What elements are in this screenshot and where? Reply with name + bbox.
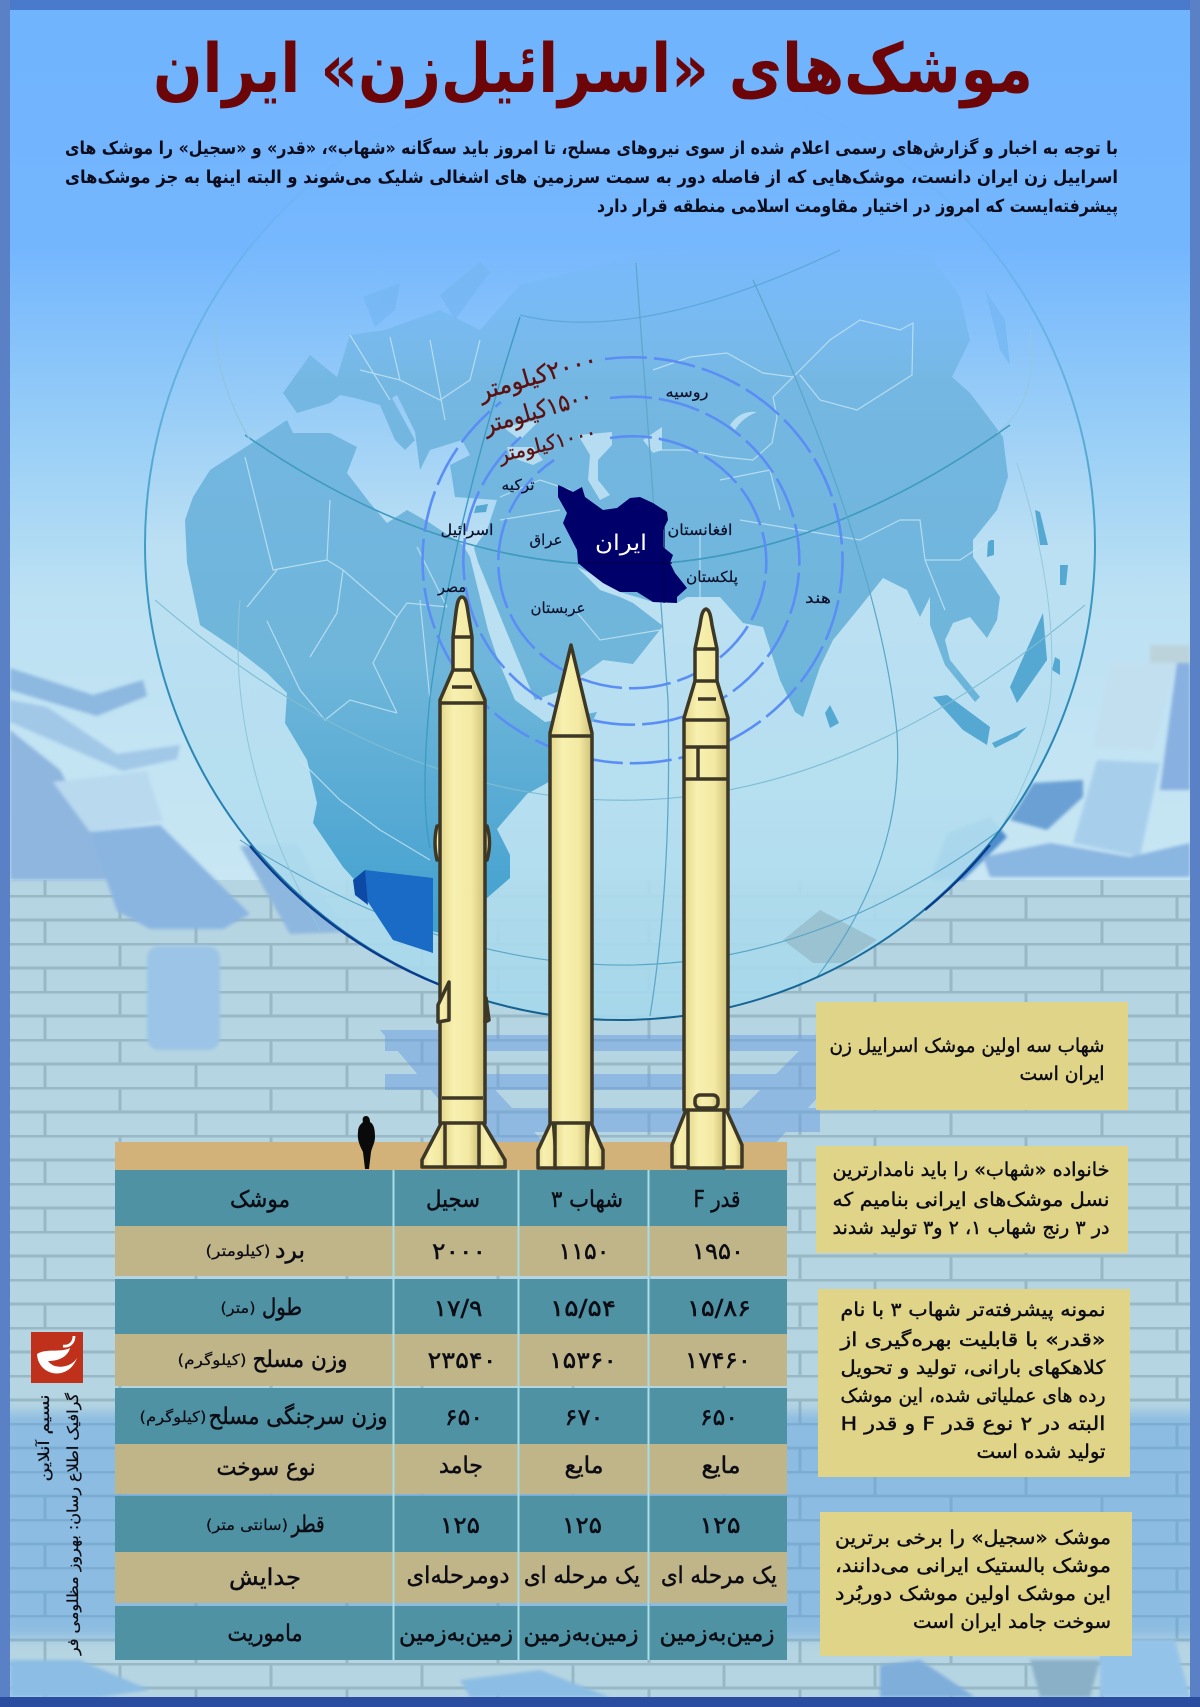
column: Sejil values: زمین‌به‌زمین [399, 1621, 513, 1647]
info box 3 [818, 1289, 1130, 1477]
column: Sejil values: ۲۰۰۰ [432, 1239, 486, 1265]
column: Ghadr F values: ۱۹۵۰ [692, 1239, 744, 1265]
fallen bricks left [10, 668, 343, 1050]
info box 4: موشک بالستیک ایرانی می‌دانند، [835, 1555, 1111, 1577]
column: Shahab 3 values: یک مرحله ای [524, 1563, 640, 1589]
range rings [423, 357, 843, 763]
brick dark blue through globe [353, 870, 433, 953]
info box 2: خانواده «شهاب» را باید نامدارترین [832, 1159, 1110, 1181]
row labels [140, 1187, 388, 1647]
row labels: ماموریت [228, 1621, 302, 1647]
column: Ghadr F values: یک مرحله ای [661, 1563, 777, 1589]
column: Ghadr F values: مایع [702, 1453, 740, 1479]
column: Shahab 3 values [524, 1187, 640, 1647]
fallen bricks bottom [10, 1640, 1190, 1697]
row labels: قطر [291, 1512, 324, 1538]
column: Shahab 3 values: زمین‌به‌زمین [524, 1621, 638, 1647]
intro paragraph [65, 137, 1118, 217]
credit: Tasnim Online: نسیم آنلاین [35, 1394, 53, 1482]
Iran grid lines [578, 510, 672, 603]
missile: Sejil [422, 597, 505, 1167]
info box 2 [816, 1146, 1128, 1253]
Iran label: ایران [595, 531, 647, 556]
person silhouette [358, 1116, 375, 1169]
column: Ghadr F values: ۶۵۰ [700, 1405, 738, 1431]
country labels: پلکستان [686, 568, 738, 587]
column: Sejil values: جامد [439, 1453, 483, 1479]
column: Shahab 3 values: ۱۲۵ [562, 1513, 602, 1539]
row labels: موشک [230, 1187, 290, 1213]
country labels: عربستان [530, 599, 586, 617]
info box 2: در ۳ رنج شهاب ۱، ۲ و۳ تولید شدند [832, 1217, 1110, 1239]
landmass: Eurasia [283, 245, 1008, 717]
ground strip [115, 1142, 787, 1170]
country borders [245, 320, 990, 860]
info box 4: این موشک اولین موشک دوربُرد [835, 1583, 1111, 1605]
info box 3: کلاهکهای بارانی، تولید و تحویل [840, 1357, 1107, 1379]
comparison table [115, 1170, 787, 1660]
background brick wall [0, 880, 1200, 1707]
row labels: نوع سوخت [216, 1455, 316, 1481]
country labels: مصر [437, 578, 466, 596]
globe [145, 70, 1095, 1020]
row labels: (سانتی متر) [206, 1516, 288, 1534]
info box 1: ایران است [1020, 1063, 1104, 1085]
intro paragraph: اسراییل زن ایران دانست، موشک‌هایی که از فاصله دور به سمت سرزمین های اشغالی شلیک می‌شوند و البته اینها به جز موشک‌های [65, 167, 1118, 188]
row labels: برد [275, 1238, 305, 1264]
row labels: وزن مسلح [252, 1347, 348, 1373]
country labels: ترکیه [502, 476, 534, 494]
column: Shahab 3 values: ۱۵۳۶۰ [549, 1348, 617, 1374]
info box 3: نمونه پیشرفته‌تر شهاب ۳ با نام [840, 1299, 1106, 1321]
table column lines [394, 1170, 648, 1660]
missile: Ghadr F [672, 609, 742, 1168]
row labels: (کیلومتر) [206, 1242, 270, 1260]
range labels [474, 345, 600, 467]
inland seas [503, 412, 757, 500]
islands [474, 504, 1068, 748]
globe sphere [145, 70, 1095, 1020]
country labels [437, 383, 831, 617]
background sky [0, 0, 1200, 880]
column: Shahab 3 values: ۶۷۰ [564, 1405, 604, 1431]
info box 1 [816, 1002, 1128, 1110]
table rows [115, 1170, 787, 1660]
country labels: اسرائیل [440, 521, 494, 539]
info box 4: موشک «سجیل» را برخی برترین [835, 1527, 1111, 1549]
column: Shahab 3 values: شهاب ۳ [551, 1187, 623, 1213]
credit: graphic author: گرافیک اطلاع رسان: بهروز مظلومی فر [64, 1392, 82, 1656]
info box 1: شهاب سه اولین موشک اسراییل زن [830, 1035, 1104, 1057]
info box 4: سوخت جامد ایران است [913, 1611, 1111, 1633]
title: موشک‌های «اسرائیل‌زن» ایران [153, 30, 1033, 109]
row labels: جدایش [229, 1565, 301, 1591]
column: Sejil values: ۶۵۰ [445, 1405, 483, 1431]
range labels: ۲۰۰۰کیلومتر [474, 345, 600, 406]
range labels: ۱۵۰۰کیلومتر [479, 381, 595, 439]
faint northern islands [363, 262, 1010, 365]
missile: Shahab 3 [538, 645, 603, 1168]
column: Shahab 3 values: ۱۵/۵۴ [550, 1296, 616, 1322]
info box 3: تولید شده است [976, 1441, 1106, 1463]
fallen bricks right [930, 645, 1190, 880]
row labels: وزن سرجنگی مسلح [208, 1403, 388, 1430]
intro paragraph: پیشرفته‌ایست که امروز در اختیار مقاومت اسلامی منطقه قرار دارد [597, 196, 1118, 217]
Iran [558, 485, 687, 603]
row labels: (کیلوگرم) [140, 1408, 206, 1426]
column: Ghadr F values: ۱۷۴۶۰ [685, 1348, 751, 1374]
dark rim highlights [250, 845, 990, 985]
info box 3: البته در ۲ نوع قدر F و قدر H [840, 1413, 1106, 1435]
info box 4 [820, 1512, 1132, 1656]
range labels: ۱۰۰۰کیلومتر [495, 419, 599, 467]
country labels: هند [805, 589, 831, 607]
column: Sejil values: ۱۷/۹ [434, 1296, 482, 1322]
country labels: عراق [530, 531, 562, 549]
column: Shahab 3 values: مایع [564, 1453, 604, 1479]
broken star shape behind missiles [380, 1030, 880, 1160]
brick seen through globe [783, 910, 877, 963]
column: Sejil values: سجیل [426, 1187, 480, 1213]
row labels: طول [262, 1295, 302, 1321]
column: Sejil values: ۱۲۵ [440, 1513, 480, 1539]
landmass: Africa [185, 420, 597, 933]
column: Sejil values [399, 1187, 513, 1647]
info box 2: نسل موشک‌های ایرانی بنامیم که [832, 1189, 1110, 1211]
column: Ghadr F values: زمین‌به‌زمین [660, 1621, 774, 1647]
logo: Tasnim [31, 1332, 83, 1383]
column: Ghadr F values [660, 1187, 777, 1647]
globe rim [145, 70, 1095, 1020]
row labels: (کیلوگرم) [178, 1351, 246, 1369]
column: Sejil values: دومرحله‌ای [406, 1563, 510, 1589]
row labels: (متر) [220, 1299, 256, 1317]
country labels: روسیه [666, 383, 708, 401]
grid lines [155, 250, 1085, 1016]
column: Ghadr F values: قدر F [694, 1187, 740, 1213]
info box 3: «قدر» با قابلیت بهره‌گیری از [839, 1328, 1106, 1351]
column: Shahab 3 values: ۱۱۵۰ [558, 1239, 610, 1265]
column: Sejil values: ۲۳۵۴۰ [428, 1348, 496, 1374]
info box 3: رده های عملیاتی شده، این موشک [840, 1385, 1106, 1407]
column: Ghadr F values: ۱۲۵ [700, 1513, 740, 1539]
column: Ghadr F values: ۱۵/۸۶ [687, 1296, 751, 1322]
country labels: افغانستان [668, 521, 732, 539]
